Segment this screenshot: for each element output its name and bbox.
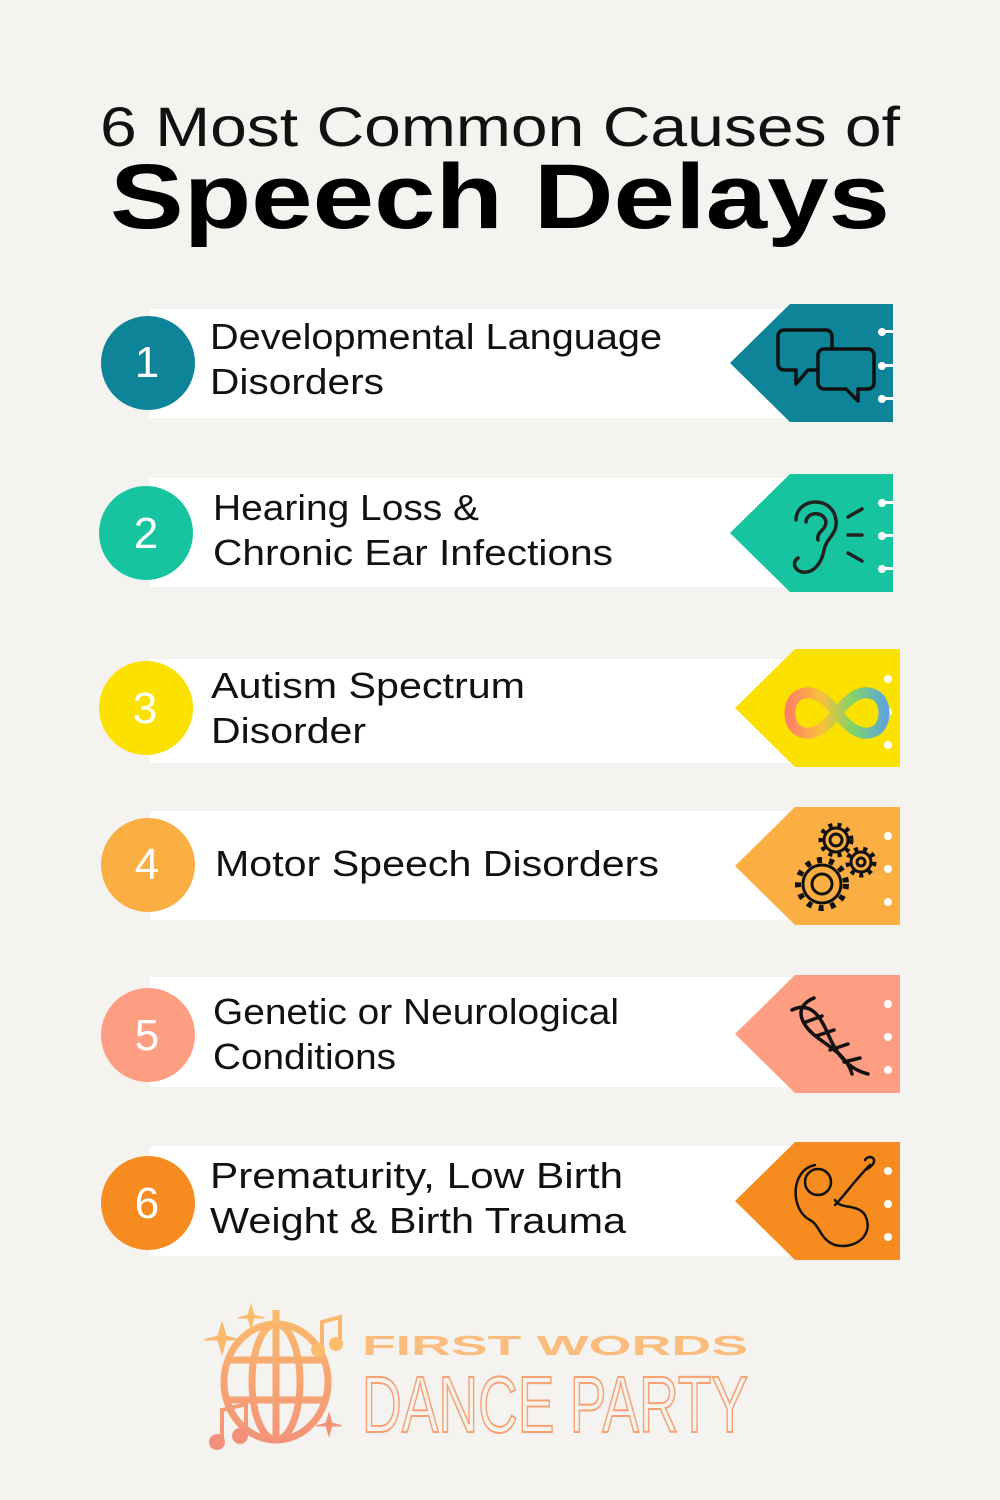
title: Speech Delays — [110, 146, 890, 248]
icon: speech bubbles tag — [730, 304, 894, 422]
item 4: motor speech disorders: 4 — [135, 840, 159, 889]
logo: first words dance party — [204, 1305, 748, 1450]
item 1: developmental language disorders: Disorders — [210, 361, 384, 402]
item 3: autism spectrum disorder: Autism Spectrum — [211, 665, 525, 706]
title — [100, 95, 901, 248]
item 2: hearing loss: 2 — [134, 509, 158, 558]
icon: disco ball — [204, 1305, 343, 1450]
item 1: developmental language disorders: Developmental Language — [210, 316, 662, 357]
icon: ear tag — [730, 474, 894, 592]
logo: first words dance party: FIRST WORDS — [362, 1330, 748, 1361]
item 3: autism spectrum disorder — [99, 649, 900, 767]
item 3: autism spectrum disorder: Disorder — [211, 710, 366, 751]
item 6: prematurity: Prematurity, Low Birth — [210, 1155, 623, 1196]
icon: fetus tag — [735, 1142, 900, 1260]
item 2: hearing loss — [99, 474, 894, 592]
item 5: genetic or neurological conditions: Conditions — [213, 1036, 396, 1077]
item 5: genetic or neurological conditions — [101, 975, 900, 1093]
item 1: developmental language disorders — [101, 304, 894, 422]
title: 6 Most Common Causes of — [100, 95, 901, 158]
icon: gears tag — [735, 807, 900, 925]
item 2: hearing loss: Hearing Loss & — [213, 487, 479, 528]
item 5: genetic or neurological conditions: Genetic or Neurological — [213, 991, 619, 1032]
item 6: prematurity: Weight & Birth Trauma — [210, 1200, 627, 1241]
item 4: motor speech disorders — [101, 807, 900, 925]
icon: DNA tag — [735, 975, 900, 1093]
logo: first words dance party: DANCE PARTY — [362, 1360, 748, 1449]
item 4: motor speech disorders: Motor Speech Disorders — [215, 843, 659, 884]
item 5: genetic or neurological conditions: 5 — [135, 1011, 159, 1060]
icon: infinity tag — [735, 649, 900, 767]
item 6: prematurity — [101, 1142, 900, 1260]
item 3: autism spectrum disorder: 3 — [133, 684, 157, 733]
item 6: prematurity: 6 — [135, 1179, 159, 1228]
item 2: hearing loss: Chronic Ear Infections — [213, 532, 613, 573]
item 1: developmental language disorders: 1 — [135, 338, 159, 387]
